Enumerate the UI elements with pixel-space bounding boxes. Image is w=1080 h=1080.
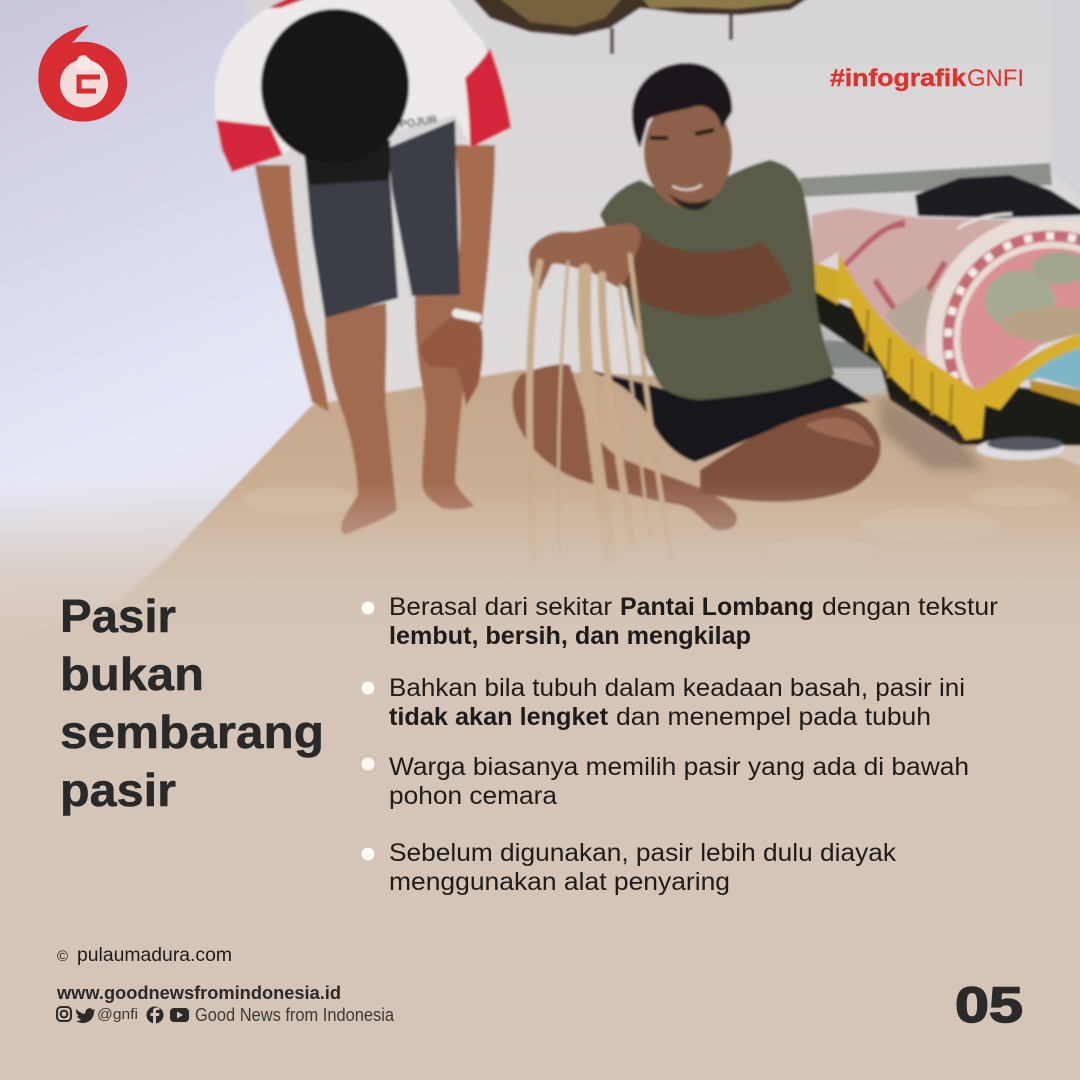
floor shadow by bed — [880, 395, 985, 470]
bullet list — [362, 593, 998, 896]
standing man: shirt — [215, 0, 511, 172]
page number: 05 — [955, 977, 1023, 1033]
back wall — [240, 0, 1080, 420]
logo eagle head — [74, 55, 104, 72]
bullet 4 — [362, 839, 897, 896]
bullet 2: dan menempel pada tubuh — [616, 703, 931, 731]
icon: facebook — [146, 1006, 164, 1024]
logo: GNFI — [38, 25, 127, 122]
bullet 1: Pantai Lombang — [620, 593, 814, 621]
heading — [60, 590, 324, 816]
under-bed wall — [815, 320, 885, 395]
under-bed shadow — [812, 290, 1080, 445]
icon: youtube — [170, 1008, 189, 1022]
heading: pasir — [60, 764, 176, 816]
bullet 2: Bahkan bila tubuh dalam keadaan basah, pasir ini — [389, 674, 965, 702]
standing man: head — [261, 9, 409, 163]
heading: sembarang — [60, 706, 324, 758]
hashtag — [830, 65, 1024, 92]
social media row — [57, 1005, 395, 1025]
yellow fringe — [813, 252, 1080, 440]
right wall section — [1050, 0, 1080, 205]
black jacket on bed — [915, 175, 1080, 218]
icon: instagram — [57, 1007, 71, 1021]
page name: Good News from Indonesia — [195, 1005, 395, 1025]
logo red swirl — [38, 25, 127, 122]
standing man: arms and hands — [255, 145, 495, 412]
heading: Pasir — [60, 590, 176, 642]
bullet 1: Berasal dari sekitar — [389, 593, 612, 621]
fade from photo into beige panel — [0, 480, 1080, 650]
logo white emblem ring — [60, 60, 108, 108]
seated man: arm and hands — [529, 224, 792, 316]
bed mattress edge — [1000, 340, 1080, 392]
bullet 1 — [362, 593, 998, 650]
standing man: denim shorts — [305, 120, 460, 318]
bullet 3: Warga biasanya memilih pasir yang ada di bawah — [389, 753, 969, 781]
logo G mark — [79, 77, 100, 91]
bedsheet — [810, 207, 1080, 392]
bullet 4: menggunakan alat penyaring — [389, 868, 730, 896]
wall decoration: wayang — [465, 0, 820, 54]
standing man: inner black shirt — [303, 140, 390, 185]
plate on floor — [976, 438, 1064, 460]
bullet 3 — [362, 753, 969, 810]
left wall — [0, 0, 312, 650]
bullet 3: pohon cemara — [389, 782, 557, 810]
bullet 2 — [362, 674, 965, 731]
bullet 2: tidak akan lengket — [389, 703, 609, 731]
hashtag: #infografik — [830, 65, 967, 92]
under-bed board — [825, 340, 885, 368]
photo credit: © — [57, 948, 68, 965]
heading: bukan — [60, 648, 204, 700]
standing man: shirt: POJUR — [399, 114, 438, 131]
website url: www.goodnewsfromindonesia.id — [56, 983, 341, 1003]
hashtag: GNFI — [967, 65, 1024, 92]
bullet 1: lembut, bersih, dan mengkilap — [389, 622, 751, 650]
standing man: wristband — [451, 308, 483, 323]
sand floor — [0, 370, 1080, 650]
bullet 4: Sebelum digunakan, pasir lebih dulu diayak — [389, 839, 897, 867]
icon: twitter — [76, 1008, 95, 1023]
bullet 1: dengan tekstur — [822, 593, 998, 621]
bed frame — [800, 163, 1052, 197]
photo credit: pulaumadura.com — [77, 945, 232, 966]
seated man: shorts — [570, 365, 870, 462]
handle: @gnfi — [97, 1006, 138, 1023]
photo: two men with sand on a bedroom floor — [0, 0, 1080, 650]
seated man: legs — [513, 364, 881, 530]
falling sand streams — [529, 255, 672, 560]
standing man: legs — [325, 292, 474, 535]
seated man: head — [632, 63, 732, 210]
sand ripples — [240, 486, 1070, 560]
seated man: shirt — [600, 160, 835, 400]
